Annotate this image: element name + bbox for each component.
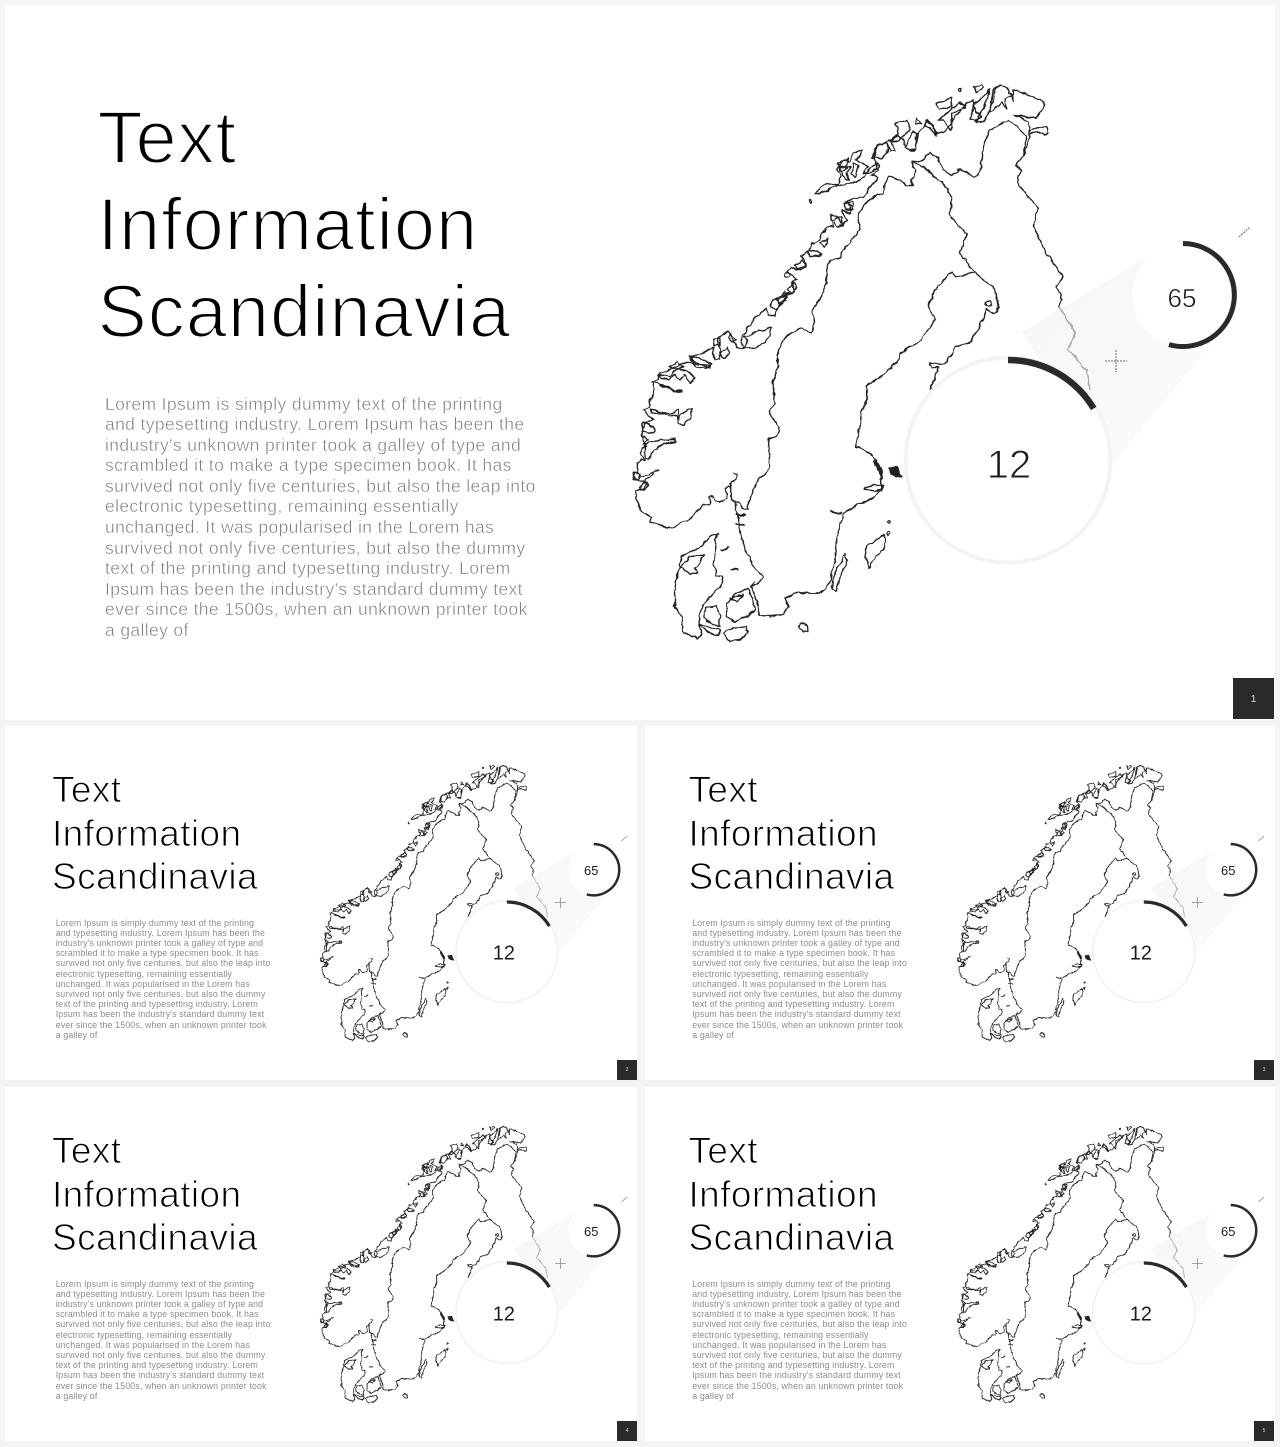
title: Text <box>98 96 237 178</box>
title <box>688 1130 894 1258</box>
body text: unchanged. It was popularised in the Lorem has <box>692 979 886 989</box>
body text: a galley of <box>105 620 189 640</box>
title: Text <box>52 1130 121 1171</box>
body text: electronic typesetting, remaining essentially <box>692 969 869 979</box>
title <box>52 769 258 897</box>
body text: scrambled it to make a type specimen book. It has <box>105 455 512 475</box>
border segment in shadow <box>1168 1236 1184 1278</box>
gauge: 12 <box>1092 1262 1194 1363</box>
body text: ever since the 1500s, when an unknown printer took <box>56 1381 267 1391</box>
body text: a galley of <box>692 1391 734 1401</box>
body text <box>692 918 907 1040</box>
title: Information <box>98 182 478 266</box>
body text: Lorem Ipsum is simply dummy text of the printing <box>692 1278 891 1288</box>
page number: 2 <box>626 1067 628 1073</box>
icon: tick mark <box>622 1197 627 1202</box>
map with gauges <box>632 84 1250 643</box>
callout shadow <box>1150 1212 1246 1317</box>
gauge: 65: 65 <box>584 1224 598 1239</box>
body text: ever since the 1500s, when an unknown printer took <box>105 599 528 619</box>
body text <box>692 1278 907 1401</box>
icon: tick mark <box>1258 836 1263 841</box>
icon: crosshair <box>1191 1258 1202 1269</box>
body text: survived not only five centuries, but also the dummy <box>105 538 525 558</box>
body text: Lorem Ipsum is simply dummy text of the printing <box>105 394 503 414</box>
body text: survived not only five centuries, but also the dummy <box>56 989 265 999</box>
page number <box>617 1060 637 1080</box>
body text: text of the printing and typesetting industry. Lorem <box>692 1360 894 1370</box>
body text: survived not only five centuries, but also the dummy <box>692 1350 902 1360</box>
gauge: 12 <box>456 1262 558 1363</box>
body text: scrambled it to make a type specimen book. It has <box>692 948 895 958</box>
body text: Ipsum has been the industry's standard dummy text <box>56 1009 264 1019</box>
body text: scrambled it to make a type specimen book. It has <box>692 1309 895 1319</box>
page number <box>1254 1060 1274 1080</box>
title: Scandinavia <box>688 1217 894 1258</box>
body text: Lorem Ipsum is simply dummy text of the printing <box>692 918 891 928</box>
icon: crosshair <box>1191 897 1202 908</box>
body text: a galley of <box>692 1030 734 1040</box>
title: Information <box>688 1174 878 1215</box>
border segment in shadow <box>532 875 548 917</box>
gauge: 12: 12 <box>1129 1303 1151 1325</box>
body text: and typesetting industry. Lorem Ipsum has been the <box>56 1289 265 1299</box>
border segment in shadow <box>1168 875 1184 917</box>
panel: slide 5 <box>645 1087 1275 1441</box>
body text: electronic typesetting, remaining essentially <box>692 1330 869 1340</box>
body text: Lorem Ipsum is simply dummy text of the printing <box>56 1278 254 1288</box>
body text: unchanged. It was popularised in the Lorem has <box>105 517 494 537</box>
icon: crosshair <box>555 897 566 908</box>
body text: unchanged. It was popularised in the Lorem has <box>692 1340 886 1350</box>
map with gauges <box>320 765 628 1042</box>
body text: and typesetting industry. Lorem Ipsum has been the <box>105 414 524 434</box>
body text: and typesetting industry. Lorem Ipsum has been the <box>692 1289 901 1299</box>
title: Scandinavia <box>52 1217 258 1258</box>
body text: survived not only five centuries, but also the leap into <box>692 1319 907 1329</box>
body text: electronic typesetting, remaining essentially <box>105 496 459 516</box>
map of Scandinavia <box>957 765 1171 1042</box>
title: Text <box>688 1130 758 1171</box>
body text: scrambled it to make a type specimen book. It has <box>56 948 259 958</box>
title: Information <box>688 813 878 854</box>
title: Information <box>52 813 242 854</box>
body text: Ipsum has been the industry's standard dummy text <box>692 1370 901 1380</box>
body text: unchanged. It was popularised in the Lorem has <box>56 1340 250 1350</box>
body text: and typesetting industry. Lorem Ipsum has been the <box>692 928 901 938</box>
callout shadow <box>514 1212 609 1317</box>
body text: survived not only five centuries, but also the leap into <box>105 476 536 496</box>
panel: main slide <box>5 5 1275 720</box>
gauge: 65: 65 <box>1168 283 1196 313</box>
body text: Ipsum has been the industry's standard dummy text <box>56 1370 264 1380</box>
gauge: 12: 12 <box>493 942 515 964</box>
title: Information <box>52 1174 242 1215</box>
body text: Ipsum has been the industry's standard dummy text <box>105 579 523 599</box>
icon: tick mark <box>622 836 627 841</box>
title <box>688 769 894 897</box>
page number: 1 <box>1251 694 1256 705</box>
title: Text <box>52 769 121 810</box>
body text: unchanged. It was popularised in the Lorem has <box>56 979 250 989</box>
callout shadow <box>1150 851 1246 956</box>
body text: industry's unknown printer took a galley of type and <box>692 1299 900 1309</box>
gauge: 65 <box>568 844 619 895</box>
page number: 3 <box>1263 1067 1265 1073</box>
map with gauges <box>956 765 1264 1042</box>
body text: text of the printing and typesetting industry. Lorem <box>56 1360 258 1370</box>
title: Text <box>688 769 758 810</box>
body text: industry's unknown printer took a galley of type and <box>692 938 900 948</box>
title: Scandinavia <box>52 856 258 897</box>
body text <box>105 394 536 640</box>
gauge: 65: 65 <box>1221 863 1235 878</box>
page number <box>617 1421 637 1441</box>
icon: tick mark <box>1239 227 1250 237</box>
callout shadow <box>1022 257 1214 470</box>
gauge: 12: 12 <box>987 443 1031 487</box>
body text: survived not only five centuries, but also the dummy <box>692 989 902 999</box>
body text: survived not only five centuries, but also the leap into <box>56 958 270 968</box>
title: Scandinavia <box>98 270 511 352</box>
gauge: 12 <box>456 901 558 1002</box>
title: Scandinavia <box>688 856 894 897</box>
body text: survived not only five centuries, but also the leap into <box>56 1319 270 1329</box>
body text: text of the printing and typesetting industry. Lorem <box>692 999 894 1009</box>
gauge: 12 <box>1092 901 1194 1002</box>
body text <box>56 918 270 1040</box>
body text: ever since the 1500s, when an unknown printer took <box>692 1020 903 1030</box>
body text: industry's unknown printer took a galley of type and <box>56 938 263 948</box>
body text: a galley of <box>56 1030 97 1040</box>
gauge: 65 <box>1205 1205 1256 1256</box>
body text: ever since the 1500s, when an unknown printer took <box>692 1381 903 1391</box>
body text: text of the printing and typesetting industry. Lorem <box>105 558 511 578</box>
callout shadow <box>514 851 609 956</box>
icon: crosshair <box>1105 350 1127 372</box>
gauge: 65 <box>568 1205 619 1256</box>
body text: Ipsum has been the industry's standard dummy text <box>692 1009 901 1019</box>
map with gauges <box>956 1126 1264 1404</box>
gauge: 12: 12 <box>493 1303 515 1325</box>
page number: 5 <box>1263 1428 1265 1434</box>
body text: a galley of <box>56 1391 97 1401</box>
gauge: 65: 65 <box>1221 1224 1235 1239</box>
gauge: 65 <box>1205 844 1256 895</box>
icon: crosshair <box>555 1258 566 1269</box>
gauge: 12 <box>906 358 1110 562</box>
body text: text of the printing and typesetting industry. Lorem <box>56 999 258 1009</box>
body text: Lorem Ipsum is simply dummy text of the printing <box>56 918 254 928</box>
page number <box>1233 678 1274 719</box>
body text <box>56 1278 270 1401</box>
page number <box>1254 1421 1274 1441</box>
body text: ever since the 1500s, when an unknown printer took <box>56 1020 267 1030</box>
border segment in shadow <box>1058 307 1090 390</box>
border segment in shadow <box>532 1236 548 1278</box>
title <box>52 1130 258 1258</box>
map of Scandinavia <box>321 765 534 1042</box>
body text: scrambled it to make a type specimen book. It has <box>56 1309 259 1319</box>
gauge: 65 <box>1132 244 1234 346</box>
gauge: 65: 65 <box>584 863 598 878</box>
map of Scandinavia <box>633 85 1063 642</box>
body text: industry's unknown printer took a galley of type and <box>56 1299 263 1309</box>
body text: electronic typesetting, remaining essentially <box>56 969 232 979</box>
map of Scandinavia <box>957 1126 1171 1403</box>
panel: slide 2 <box>5 726 637 1080</box>
body text: and typesetting industry. Lorem Ipsum has been the <box>56 928 265 938</box>
panel: slide 4 <box>5 1087 637 1441</box>
panel: slide 3 <box>645 726 1275 1080</box>
map of Scandinavia <box>321 1126 534 1403</box>
page number: 4 <box>626 1428 628 1434</box>
map with gauges <box>320 1126 628 1404</box>
body text: survived not only five centuries, but also the dummy <box>56 1350 265 1360</box>
body text: survived not only five centuries, but also the leap into <box>692 958 907 968</box>
gauge: 12: 12 <box>1129 942 1151 964</box>
body text: industry's unknown printer took a galley of type and <box>105 435 521 455</box>
body text: electronic typesetting, remaining essentially <box>56 1330 232 1340</box>
icon: tick mark <box>1258 1197 1263 1202</box>
title <box>98 96 511 352</box>
